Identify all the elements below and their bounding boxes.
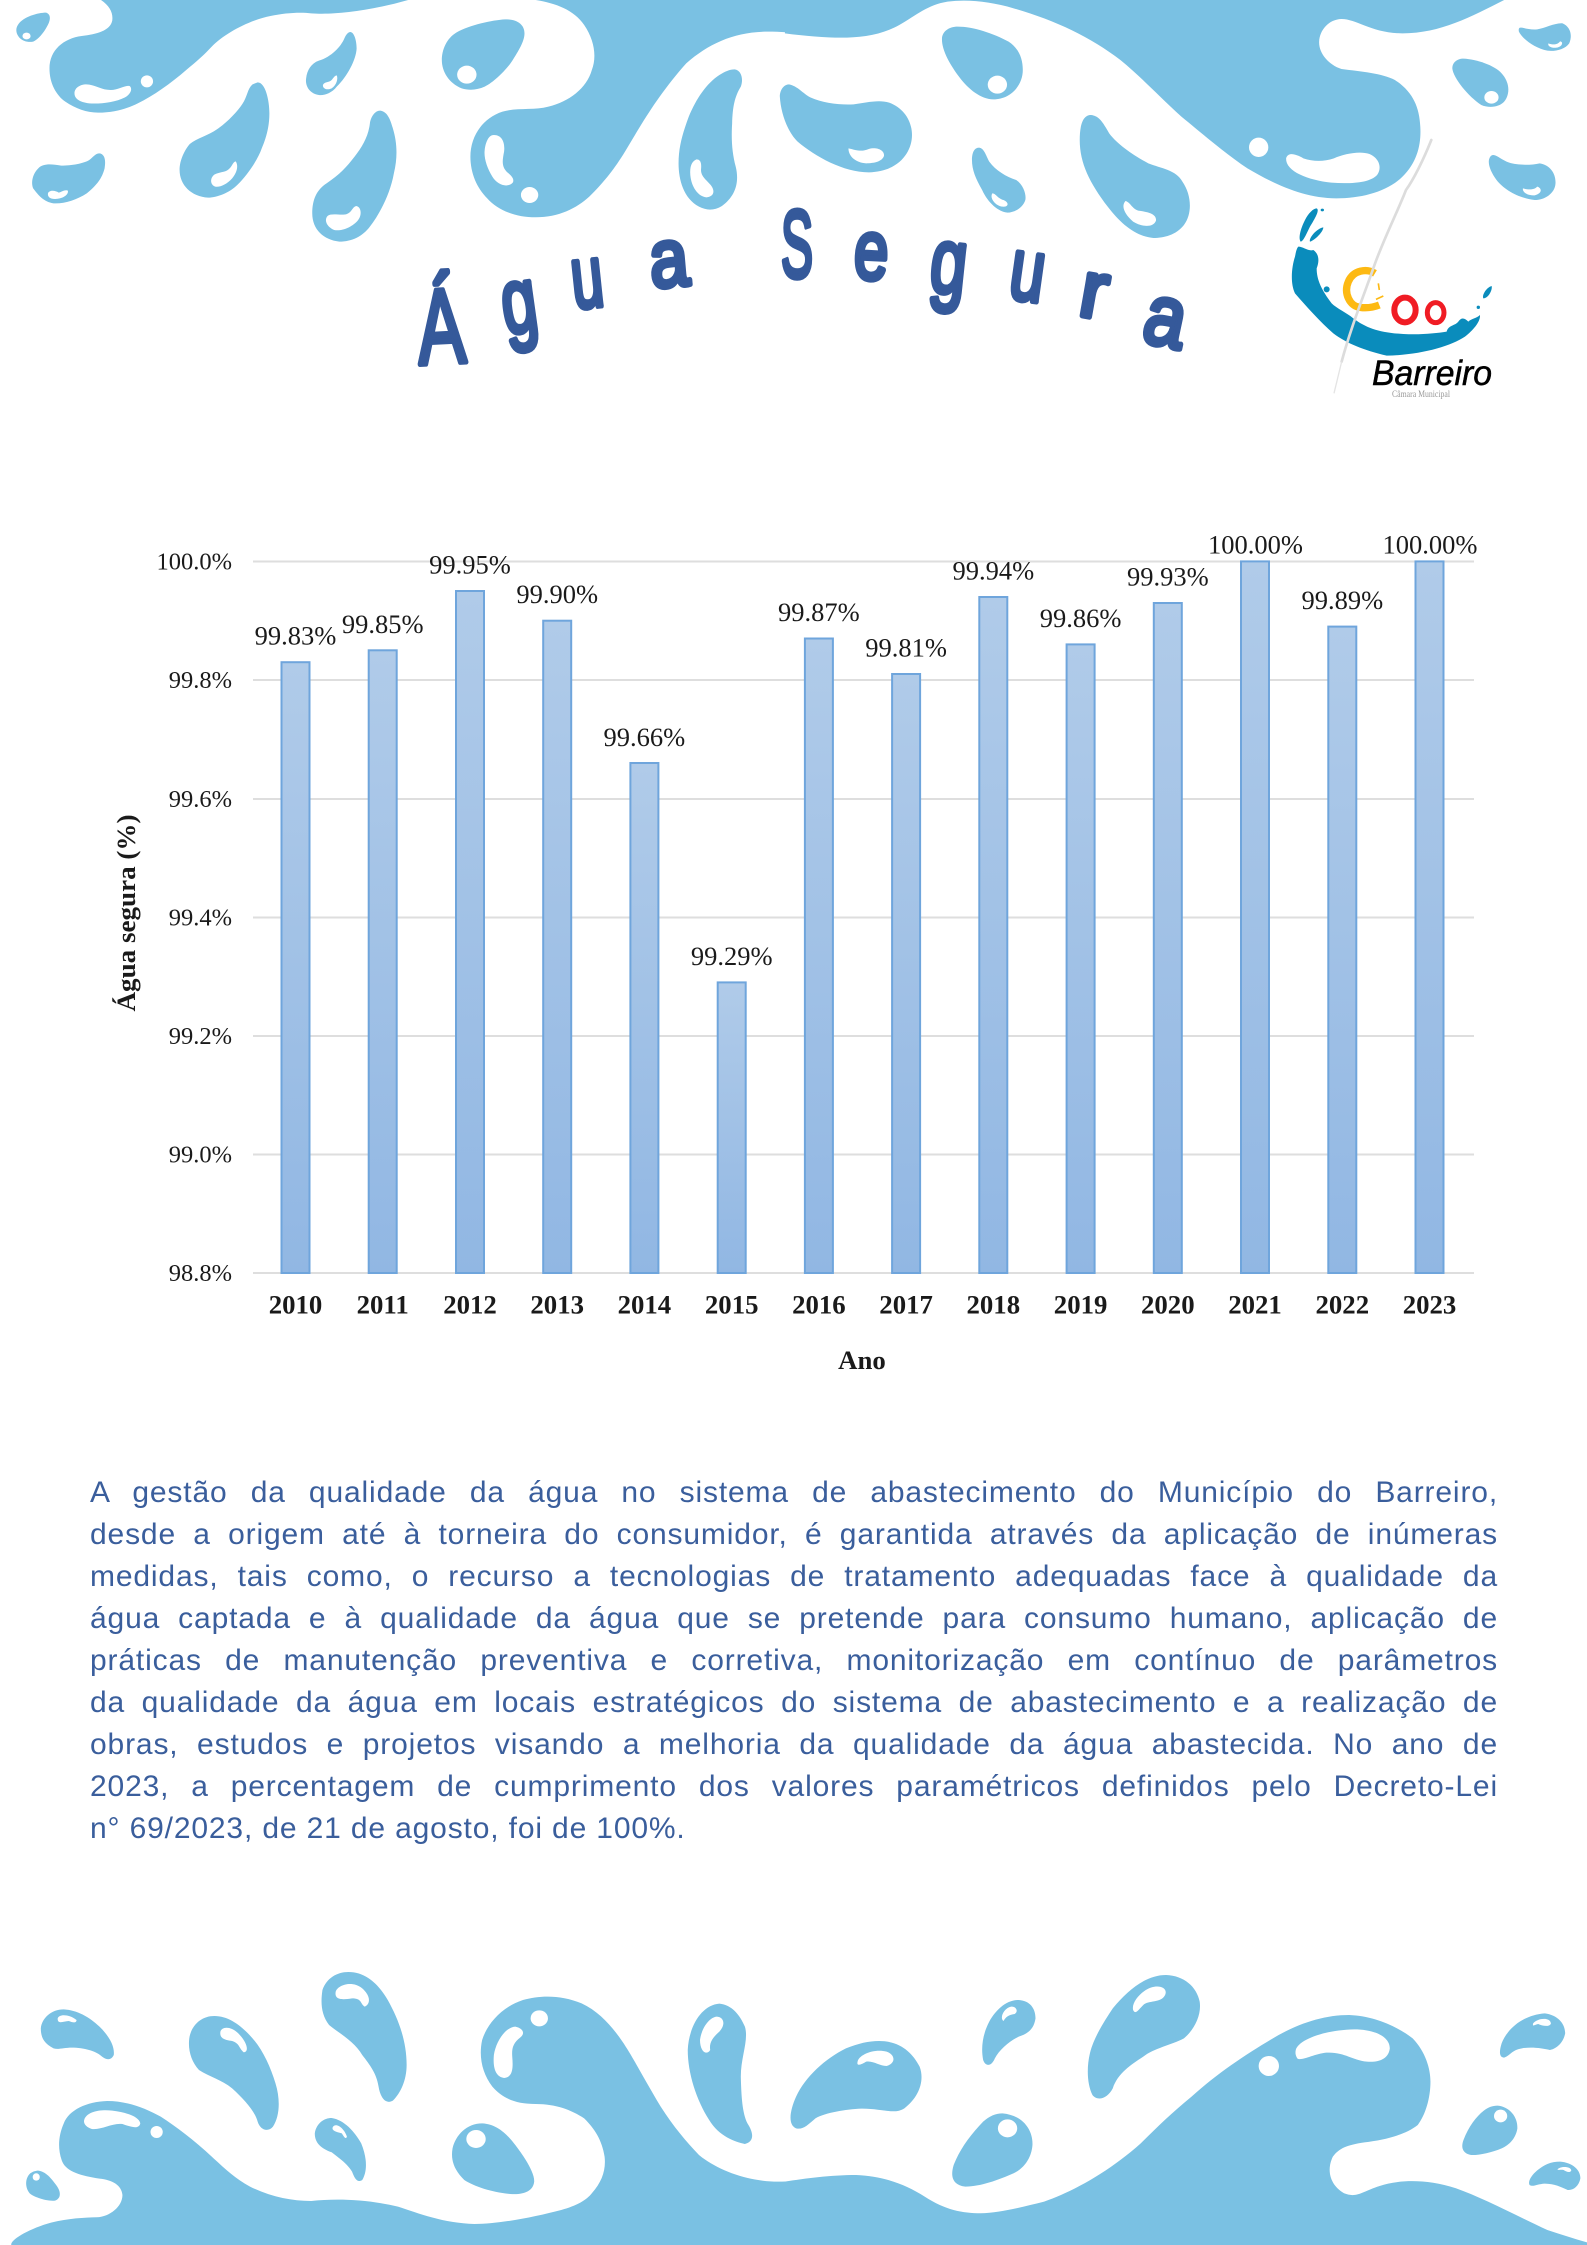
logo: Barreiro Câmara Municipal: Barreiro (1372, 354, 1492, 393)
body text paragraph: práticas de manutenção preventiva e corretiva, monitorização em contínuo de parâmetros (90, 1644, 1498, 1677)
x axis year labels: 2018 (967, 1290, 1020, 1320)
x axis year labels: 2012 (443, 1290, 497, 1320)
x axis year labels: 2016 (792, 1290, 846, 1320)
logo: Barreiro Câmara Municipal: Câmara Municipal (1392, 389, 1450, 399)
x axis year labels (269, 1290, 1456, 1320)
bar chart: Água segura por ano (112, 530, 1477, 1375)
body text paragraph: n° 69/2023, de 21 de agosto, foi de 100%. (90, 1812, 686, 1845)
y axis tick labels: 99.2% (169, 1023, 232, 1050)
x axis year labels: 2023 (1403, 1290, 1456, 1320)
data labels: 99.94% (952, 556, 1034, 586)
data labels: 99.86% (1040, 603, 1121, 633)
x axis year labels: 2017 (879, 1290, 933, 1320)
x axis year labels: 2013 (530, 1290, 584, 1320)
x axis title: Ano (838, 1345, 886, 1375)
y axis tick labels: 99.0% (169, 1142, 232, 1168)
x axis year labels: 2020 (1141, 1290, 1195, 1320)
body text paragraph: A gestão da qualidade da água no sistema de abastecimento do Município do Barreiro, (90, 1476, 1498, 1509)
y axis title: Água segura (%) (112, 814, 141, 1012)
data labels: 99.83% (255, 620, 336, 650)
title: Água Segura: g (926, 208, 973, 316)
data labels: 99.85% (342, 609, 424, 639)
data labels: 99.81% (865, 632, 947, 662)
body text paragraph: água captada e à qualidade da água que se pretende para consumo humano, aplicação de (90, 1602, 1498, 1635)
title: Água Segura: a (1136, 265, 1197, 367)
data labels: 99.95% (429, 550, 511, 580)
x axis year labels: 2019 (1054, 1290, 1107, 1320)
data labels: 99.89% (1301, 585, 1383, 615)
top water splash (16, 0, 1571, 242)
title: Água Segura (414, 191, 1197, 388)
y axis tick labels: 100.0% (156, 548, 232, 576)
title: Água Segura: a (645, 211, 693, 306)
data labels: 99.29% (691, 941, 773, 971)
logo: Barreiro Câmara Municipal (1292, 140, 1492, 399)
x axis year labels: 2021 (1228, 1290, 1282, 1320)
body text paragraph: medidas, tais como, o recurso a tecnologias de tratamento adequadas face à qualidade da (90, 1560, 1498, 1593)
title: Água Segura: e (852, 202, 891, 298)
title: Água Segura: Á (414, 267, 468, 388)
x axis year labels: 2011 (357, 1290, 409, 1320)
body text paragraph (90, 1476, 1498, 1845)
data labels (255, 530, 1477, 971)
x axis year labels: 2015 (705, 1290, 758, 1320)
body text paragraph: da qualidade da água em locais estratégicos do sistema de abastecimento e a realização de (90, 1686, 1498, 1719)
x axis year labels: 2022 (1316, 1290, 1369, 1320)
y axis tick labels: 98.8% (169, 1260, 232, 1287)
title: Água Segura: u (566, 226, 608, 328)
title: Água Segura: r (1074, 244, 1116, 336)
bars (282, 561, 1444, 1273)
data labels: 99.87% (778, 597, 860, 627)
x axis year labels: 2010 (269, 1290, 322, 1320)
bottom water splash (11, 1972, 1587, 2245)
title: Água Segura: S (781, 191, 813, 299)
data labels: 99.93% (1127, 562, 1209, 592)
title: Água Segura: u (1004, 220, 1052, 322)
body text paragraph: obras, estudos e projetos visando a melhoria da qualidade da água abastecida. No ano de (90, 1728, 1498, 1761)
data labels: 99.90% (516, 579, 598, 609)
data labels: 100.00% (1208, 530, 1303, 560)
body text paragraph: desde a origem até à torneira do consumidor, é garantida através da aplicação de inúmeras (90, 1518, 1498, 1551)
y axis tick labels (156, 548, 232, 1287)
data labels: 99.66% (604, 722, 685, 752)
title: Água Segura: g (494, 246, 543, 354)
y axis tick labels: 99.8% (169, 667, 232, 694)
body text paragraph: 2023, a percentagem de cumprimento dos valores paramétricos definidos pelo Decreto-Lei (90, 1770, 1498, 1803)
data labels: 100.00% (1383, 530, 1477, 560)
y axis tick labels: 99.6% (169, 786, 232, 813)
y axis tick labels: 99.4% (169, 904, 232, 932)
x axis year labels: 2014 (618, 1290, 671, 1320)
